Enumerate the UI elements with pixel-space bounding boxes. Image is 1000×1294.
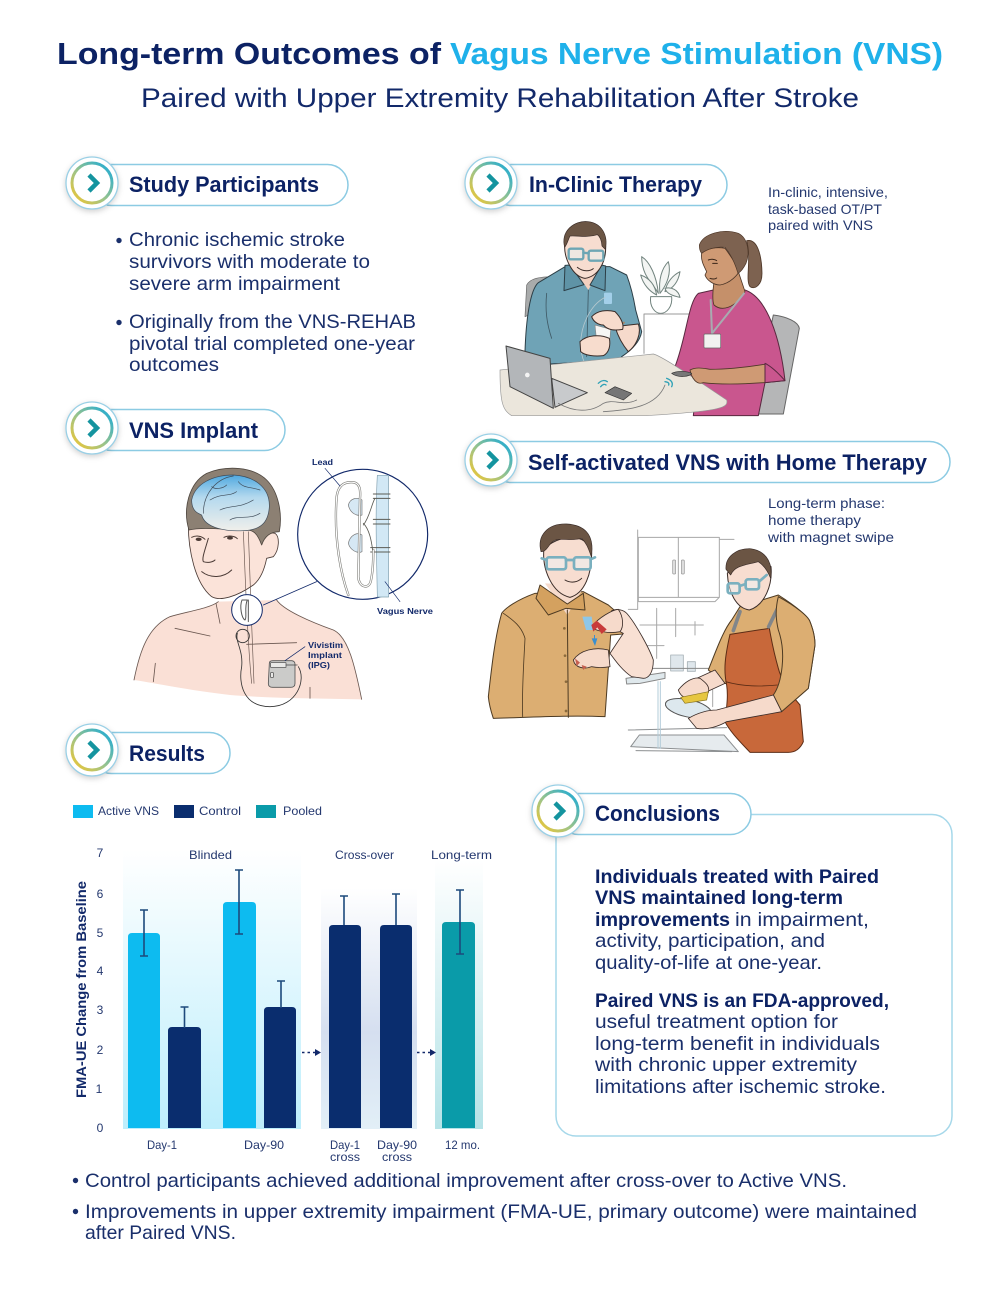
facial features [192,536,237,576]
second man upper hand [678,678,709,698]
side table [644,314,690,353]
jars [671,655,695,671]
locator inner lead [241,600,248,622]
conclusion 2: long-term benefit in individuals [595,1033,880,1055]
results bullet notes [73,1170,917,1244]
phase labels: Blinded [189,848,232,862]
implant pointer [285,647,305,661]
water stream [658,682,660,748]
connector line [263,582,317,605]
conclusion 1 [595,866,879,974]
y axis ticks: 5 [97,926,104,940]
patient neck [570,263,603,290]
therapist sleeve edge [765,363,785,383]
electrode pads [348,498,362,552]
chart legend: Pooled [283,804,322,818]
lead branch [363,498,375,550]
phase backgrounds [123,850,483,1129]
lead inner [336,482,373,595]
y axis ticks: 1 [96,1082,103,1096]
chest patch [582,617,593,630]
illustration: home therapy [488,524,815,752]
in-clinic note [768,184,888,233]
lanyard [711,293,744,333]
section header: Conclusions [532,785,751,837]
therapist chair [758,315,799,414]
bar chart [73,846,492,1164]
x axis labels: Day-1 [330,1138,360,1152]
conclusion 2: with chronic upper extremity [594,1054,857,1076]
therapist shirt [675,290,785,416]
y axis ticks: 0 [97,1121,104,1135]
first man lower hand [573,649,610,668]
subtitle: Paired with Upper Extremity Rehabilitation After Stroke [141,83,859,113]
first man head [544,537,592,597]
plate [664,695,713,722]
conclusion 1: Individuals treated with Paired [595,866,879,888]
patient lower hand [580,336,610,356]
conclusion 1: VNS maintained long-term [595,887,843,909]
x axis labels [147,1138,480,1164]
panel: conclusions [532,785,952,1136]
second man head [727,559,771,610]
IPG details [271,663,297,677]
faucet [626,672,665,684]
section header: In-Clinic Therapy: In-Clinic Therapy [529,172,703,197]
x axis labels: cross [330,1150,360,1164]
conclusion 2: useful treatment option for [595,1011,839,1033]
patient hair [564,222,606,249]
title [57,36,943,71]
second man sleeve [773,597,815,712]
x axis labels: Day-90 [377,1138,417,1152]
torso outline [134,600,362,699]
chart legend [73,804,322,818]
section header: Self-activated VNS: Self-activated VNS with Home Therapy [528,450,928,475]
arrow: blinded to cross-over [302,1049,321,1056]
magnified inset [298,469,428,599]
x axis labels: Day-1 [147,1138,177,1152]
x axis labels: Day-90 [244,1138,284,1152]
patient glasses [569,249,603,261]
long-term note [767,495,894,545]
patient upper hand [592,311,623,330]
torso [134,600,362,699]
patient head [565,228,606,278]
counter line [653,667,717,670]
inset locator circle [232,595,262,625]
study participants text: outcomes [129,354,219,376]
callout: Vivistim Implant: Implant [308,650,342,660]
therapist ponytail [747,240,762,288]
face [188,525,278,599]
panel border [556,814,952,1136]
first man collar [536,585,585,615]
section header: VNS Implant [66,402,285,454]
arrow: cross-over to long-term [417,1049,436,1056]
first man mouth [565,578,582,582]
second man left forearm [697,670,725,693]
fingertips [575,658,587,670]
apron waist line [726,682,777,686]
lead outer [336,482,373,595]
hair [187,468,280,545]
error bars [140,870,464,1028]
conclusion 1: activity, participation, and [595,930,825,952]
placket and buttons [564,610,568,717]
conclusion 1: improvements [595,909,730,931]
y axis ticks: 4 [97,964,104,978]
placket and shirt folds [546,290,588,357]
therapist facial features [708,259,717,279]
in-clinic note: In-clinic, intensive, [768,184,888,200]
callout: Vivistim Implant: Vivistim [308,640,343,650]
chart legend: Control [199,804,241,818]
sink [628,728,738,752]
illustration: VNS implant anatomy [134,468,428,707]
apron [725,628,803,752]
cabinet handles [673,560,684,574]
phase labels: Long-term [431,848,492,862]
callout: Vivistim Implant [308,640,343,670]
kitchen cabinets and tiles [628,530,734,707]
conclusion 1: quality-of-life at one-year. [595,952,822,974]
magnet [591,621,607,634]
brain folds [203,476,260,520]
patient shirt [525,267,642,364]
x axis labels: cross [382,1150,412,1164]
first man raised arm [610,610,653,678]
patient collar [564,265,606,291]
badge [704,334,721,348]
sponge [681,692,708,703]
patient chair [525,277,553,317]
y axis ticks [96,846,104,1135]
study participants text: Chronic ischemic stroke [129,229,345,251]
controller [672,371,692,376]
study participants text: pivotal trial completed one-year [129,333,416,355]
illustration: in-clinic therapy session [500,222,799,416]
therapist forearm [690,364,768,384]
title: Vagus Nerve Stimulation (VNS) [450,36,943,71]
results bullet notes: after Paired VNS. [85,1222,236,1244]
laptop [506,346,553,408]
eyes [196,536,233,541]
therapist neck [713,272,745,308]
long-term note: with magnet swipe [767,529,894,545]
results bullet notes: Improvements in upper extremity impairment (FMA-UE, primary outcome) were maintained [85,1201,917,1223]
study participants text: severe arm impairment [129,273,341,295]
apron straps [733,600,782,631]
long-term note: home therapy [768,512,861,528]
plant [641,257,680,313]
first man glasses [542,557,595,569]
conclusion 2: limitations after ischemic stroke. [595,1076,886,1098]
therapist hair [699,231,748,273]
cables [558,385,665,412]
table top [500,354,727,416]
vagus pointer [385,582,400,602]
callout: Lead: Lead [312,457,333,467]
second man shirt [708,595,815,712]
patient forearm [615,324,639,352]
in-clinic note: paired with VNS [768,217,873,233]
results bullet notes: Control participants achieved additional improvement after cross-over to Active VNS. [85,1170,847,1192]
title: Long-term Outcomes of [57,36,442,71]
second man lower arm and hand [688,695,782,729]
study participants text: Originally from the VNS-REHAB [129,311,416,333]
conclusion 1: in impairment, [735,909,869,931]
callout: Vivistim Implant: (IPG) [308,660,330,670]
section header: Results [66,724,230,776]
IPG implant device [268,661,295,687]
cup [595,325,611,348]
second man hair [726,549,771,578]
section header: VNS Implant: VNS Implant [129,418,259,443]
chest patch [604,293,612,304]
section header: In-Clinic Therapy [465,157,727,209]
x axis labels: 12 mo. [445,1138,480,1152]
lead pointer [325,468,340,486]
y axis ticks: 2 [97,1043,104,1057]
study participants text: survivors with moderate to [129,251,370,273]
swipe arrow [592,635,597,646]
conclusion 2 [594,990,889,1098]
long-term note: Long-term phase: [768,495,885,511]
y axis ticks: 6 [97,887,104,901]
therapist face [701,248,741,285]
section header: Self-activated VNS [465,434,950,486]
first man neck [545,583,585,615]
study participants text [116,229,416,376]
lead coil [236,629,249,643]
in-clinic note: task-based OT/PT [768,201,882,217]
first man hair [540,524,592,557]
bracelet [614,323,624,328]
conclusion 2: Paired VNS is an FDA-approved, [595,990,889,1012]
wireless signals [598,378,672,387]
electrode cuffs [371,494,390,552]
section header: Conclusions: Conclusions [595,801,720,826]
stimulator device [605,387,632,400]
patient mouth [577,267,593,271]
chart legend: Active VNS [98,804,159,818]
lead wire loop [237,633,301,707]
y axis ticks: 7 [97,846,104,860]
brain [192,475,269,531]
phase labels [189,848,492,862]
nerve strands down neck [243,532,254,683]
section header: Study Participants [66,157,348,209]
first man upper hand [593,609,623,633]
phase labels: Cross-over [335,848,394,862]
y axis title: FMA-UE Change from Baseline [73,881,89,1098]
section header: Results: Results [129,741,205,766]
callout: Vagus Nerve: Vagus Nerve [377,606,433,616]
wire on shirt [581,297,605,385]
section header: Study Participants: Study Participants [129,172,319,197]
y axis ticks: 3 [97,1003,104,1017]
vagus nerve [376,475,389,597]
bars [128,902,475,1128]
first man shirt [488,592,623,718]
second man glasses [728,575,767,593]
shirt folds [503,613,525,717]
